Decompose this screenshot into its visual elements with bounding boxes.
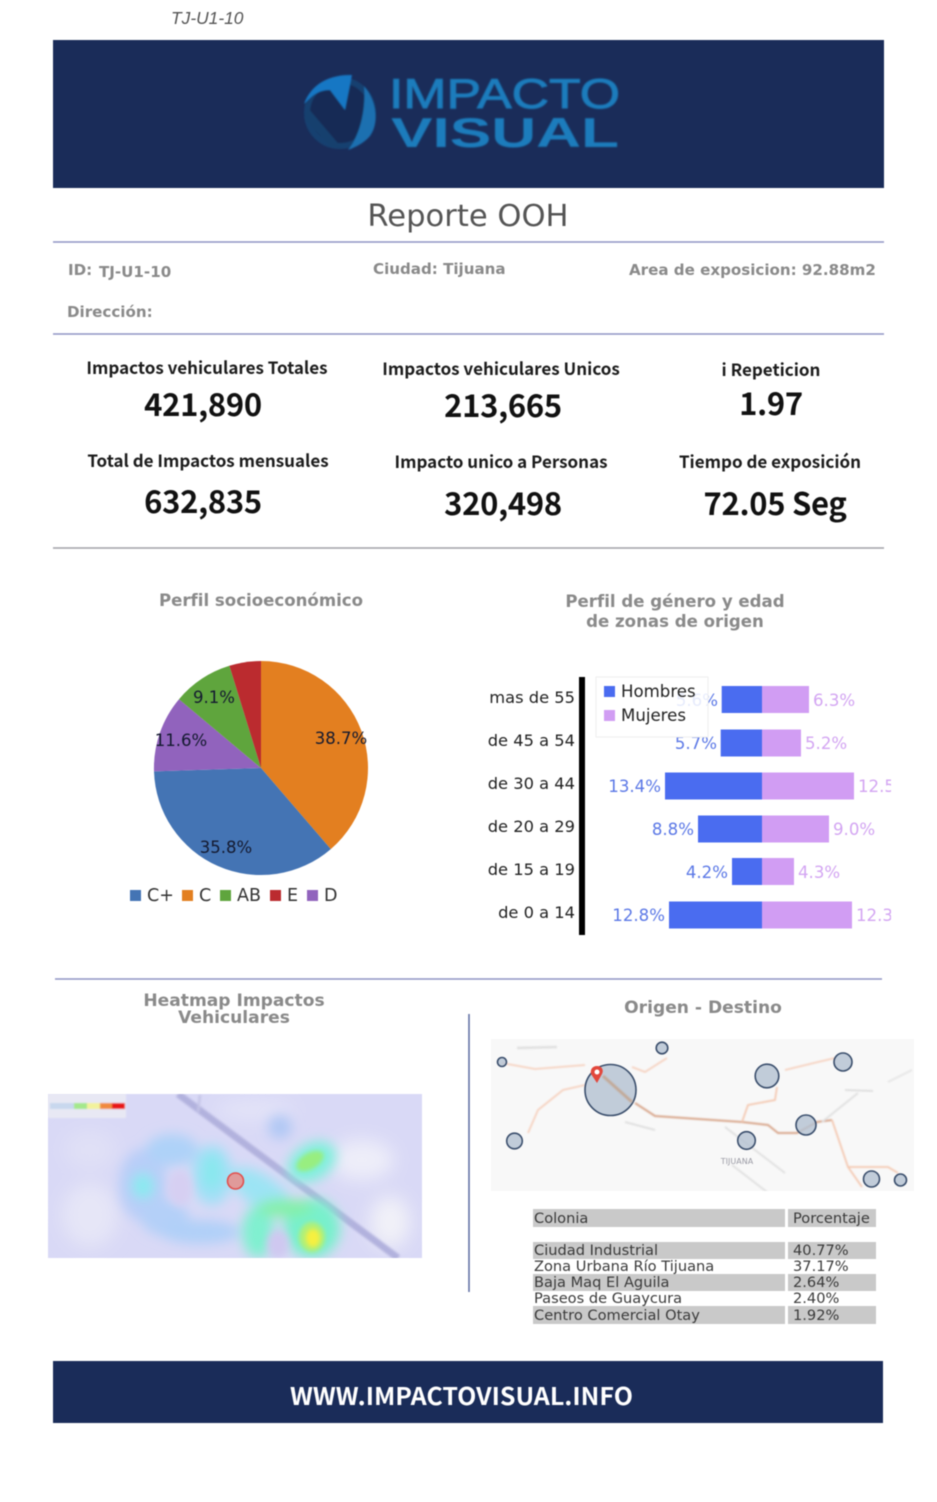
pie chart: 38.7% [315,729,367,748]
origin destination map: TIJUANA [720,1157,754,1166]
metric: exposure time: 72.05 Seg [703,479,847,524]
origin destination map [491,1039,914,1192]
footer banner: WWW.IMPACTOVISUAL.INFO [290,1378,633,1413]
heat blobs [119,1115,344,1258]
site marker [228,1173,244,1189]
origin circles [498,1042,906,1187]
population pyramid chart: 12.5% [858,777,911,796]
bar chart legend: Hombres [621,682,696,701]
metric: unique vehicle impacts [382,355,620,426]
origin destination table: 40.77% [793,1242,849,1259]
origin destination table: Ciudad Industrial [534,1242,658,1259]
origin destination table: Zona Urbana Río Tijuana [534,1258,714,1275]
metric: unique vehicle impacts: 213,665 [444,381,562,426]
road [178,1094,398,1258]
origin destination table: Colonia [534,1210,588,1227]
light zones [66,1138,412,1248]
bar chart legend: Mujeres [621,706,686,725]
population pyramid chart: 12.8% [612,906,665,925]
origin destination table [533,1209,876,1324]
site information: TJ-U1-10 [99,263,171,281]
metric: unique person impact: 320,498 [444,479,562,524]
heading: gender and age profile [565,592,785,631]
age axis and labels: de 15 a 19 [488,860,575,879]
population pyramid chart: 5.2% [805,734,847,753]
population pyramid chart: 8.8% [652,820,694,839]
bar chart legend [596,677,708,737]
pie legend: D [324,886,337,906]
age axis and labels: de 20 a 29 [488,817,575,836]
heading: origin destination: Origen - Destino [624,998,782,1018]
site information: Area de exposicion: 92.88m2 [629,261,876,279]
heading: heatmap: Vehiculares [178,1008,290,1028]
age axis and labels: de 30 a 44 [488,774,575,793]
population pyramid chart: 6.3% [813,691,855,710]
heading: heatmap [143,991,325,1028]
heading: socioeconomic profile: Perfil socioeconómico [159,591,363,610]
metric: exposure time: Tiempo de exposición [679,448,861,473]
logo wordmark: IMPACTO [389,70,620,117]
population pyramid chart: 13.4% [608,777,661,796]
population pyramid chart: 5.6% [676,691,718,710]
document code: TJ-U1-10 [171,8,244,28]
origin destination table: Porcentaje [793,1210,870,1227]
pie legend [130,886,337,906]
metric: unique person impact [394,448,608,524]
icon: logo mark [304,75,376,150]
icon: location pin [591,1066,603,1083]
heading: heatmap: Heatmap Impactos [143,991,325,1011]
pie chart: 35.8% [200,838,252,857]
population pyramid chart: 4.2% [686,863,728,882]
population pyramid chart: 5.7% [675,734,717,753]
metric: monthly impacts: Total de Impactos mensuales [87,447,329,472]
origin destination table: Paseos de Guaycura [534,1290,682,1307]
origin destination table: 2.40% [793,1290,839,1307]
metric: repetition: 1.97 [739,379,803,424]
metric: total vehicle impacts [86,354,328,425]
key metrics [86,354,861,524]
pie chart [154,661,368,875]
origin destination table: 1.92% [793,1307,839,1324]
routes [502,1047,912,1192]
pie legend: C+ [147,886,174,906]
site information: Ciudad: Tijuana [373,260,506,278]
age axis and labels: de 0 a 14 [498,903,575,922]
site information: Dirección: [67,303,153,321]
site information: ID: [68,261,92,279]
metric: monthly impacts: 632,835 [144,477,262,522]
age axis and labels: mas de 55 [489,688,575,707]
population pyramid chart [608,686,911,928]
origin destination table: 2.64% [793,1274,839,1291]
origin destination table: Baja Maq El Aguila [534,1274,670,1291]
pie legend: E [287,886,298,906]
pie legend: AB [237,886,261,906]
pie chart: 9.1% [193,688,235,707]
heading: gender and age profile: Perfil de género y edad [565,592,785,611]
population pyramid chart: 9.0% [833,820,875,839]
heatmap image [48,1094,422,1258]
logo wordmark [389,70,620,156]
metric: monthly impacts [87,447,329,522]
heatmap scale legend [48,1094,126,1118]
metric: exposure time [679,448,861,524]
origin destination table: Centro Comercial Otay [534,1307,700,1324]
footer banner [53,1361,883,1423]
pie legend: C [199,886,211,906]
metric: unique vehicle impacts: Impactos vehiculares Unicos [382,355,620,380]
site information [67,260,876,321]
metric: total vehicle impacts: Impactos vehiculares Totales [86,354,328,379]
report title: Reporte OOH [367,199,569,234]
age axis and labels [488,677,585,935]
heading: gender and age profile: de zonas de origen [586,612,764,631]
header banner with logo [53,40,884,188]
origin destination table: 37.17% [793,1258,849,1275]
metric: repetition [722,356,820,424]
metric: unique person impact: Impacto unico a Personas [394,448,608,473]
population pyramid chart: 12.3% [856,906,909,925]
metric: repetition: i Repeticion [722,356,820,381]
pie chart: 11.6% [155,731,207,750]
age axis and labels: de 45 a 54 [488,731,575,750]
population pyramid chart: 4.3% [798,863,840,882]
metric: total vehicle impacts: 421,890 [144,380,262,425]
logo wordmark: VISUAL [391,109,619,156]
